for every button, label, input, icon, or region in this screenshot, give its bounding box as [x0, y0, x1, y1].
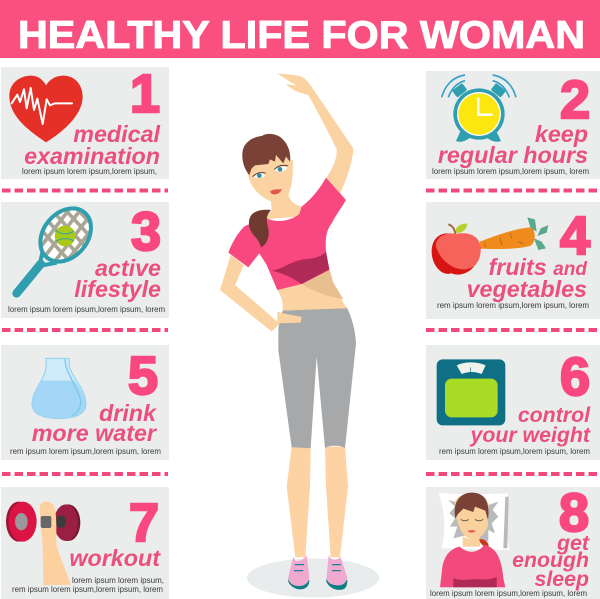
heading: workout — [69, 545, 161, 571]
caption: rem ipsum lorem ipsum,lorem ipsum, lorem — [437, 300, 589, 310]
number 8: 8 — [559, 483, 589, 543]
panel: keep regular hours — [426, 70, 600, 179]
panel: workout — [1, 487, 169, 599]
icon: sleeping woman — [438, 493, 509, 587]
header banner — [0, 0, 600, 58]
icon: dumbbell in hand — [6, 501, 80, 585]
icon: water flask — [32, 358, 86, 419]
panel: active lifestyle — [1, 198, 169, 318]
raised arm — [277, 73, 353, 197]
bent arm — [220, 255, 302, 332]
ponytail — [249, 210, 271, 247]
heading: drink — [99, 400, 157, 426]
belly shade — [302, 269, 343, 299]
pink top — [228, 178, 346, 290]
shirt shadow band — [272, 252, 329, 284]
heading: active — [95, 255, 161, 281]
heading line 2: more water — [32, 420, 158, 446]
icon: heart — [9, 76, 83, 142]
number 4: 4 — [560, 206, 590, 266]
neck and torso skin — [263, 195, 347, 311]
icon: tennis racket — [17, 198, 101, 293]
panel: get enough sleep — [426, 483, 600, 599]
heading: fruits and — [488, 254, 587, 280]
heading line 2: vegetables — [467, 276, 587, 302]
number 5: 5 — [128, 346, 158, 406]
icon: apple and carrot — [432, 217, 548, 275]
number 6: 6 — [560, 347, 590, 407]
panel: drink more water — [1, 345, 169, 460]
caption line 2: rem ipsum lorem ipsum,lorem ipsum, lorem — [12, 584, 163, 594]
leggings — [278, 307, 356, 448]
lips — [270, 189, 282, 194]
heading line 2: regular hours — [438, 142, 588, 168]
ground shadow — [247, 558, 379, 598]
heading line 2: enough — [512, 548, 589, 572]
heading: get — [556, 531, 590, 555]
hair — [242, 134, 290, 175]
caption: lorem ipsum lorem ipsum,lorem ipsum, lorem — [8, 304, 165, 314]
title: HEALTHY LIFE FOR WOMAN — [18, 14, 585, 57]
heading: keep — [535, 121, 588, 147]
heading line 2: examination — [24, 143, 160, 169]
panel: control your weight — [426, 345, 600, 460]
number 7: 7 — [129, 493, 159, 553]
number 1: 1 — [130, 64, 160, 124]
face — [247, 150, 293, 203]
heading line 2: lifestyle — [74, 276, 161, 302]
icon: bathroom scale — [437, 359, 505, 425]
upper body — [220, 73, 356, 448]
caption: rem ipsum lorem ipsum,lorem ipsum, lorem — [439, 446, 590, 456]
icon: alarm clock — [442, 75, 516, 142]
heading: control — [518, 403, 591, 427]
caption: lorem ipsum lorem ipsum,lorem ipsum, lorem — [430, 588, 587, 598]
number 2: 2 — [560, 70, 590, 130]
caption: lorem ipsum lorem ipsum,lorem ipsum, lorem — [432, 166, 589, 176]
number 3: 3 — [131, 202, 161, 262]
panel: medical examination — [1, 64, 169, 179]
caption: lorem ipsum lorem ipsum,lorem ipsum, — [22, 166, 157, 176]
heading line 2: your weight — [469, 423, 591, 447]
woman figure — [220, 73, 379, 597]
caption: lorem ipsum lorem ipsum, — [72, 575, 164, 585]
heading: medical — [73, 121, 161, 147]
caption: rem ipsum lorem ipsum,lorem ipsum, lorem — [10, 446, 161, 456]
eyes — [253, 167, 287, 178]
legs and shoes — [287, 447, 348, 590]
heading line 3: sleep — [535, 567, 589, 591]
panel: fruits and vegetables — [426, 202, 600, 319]
